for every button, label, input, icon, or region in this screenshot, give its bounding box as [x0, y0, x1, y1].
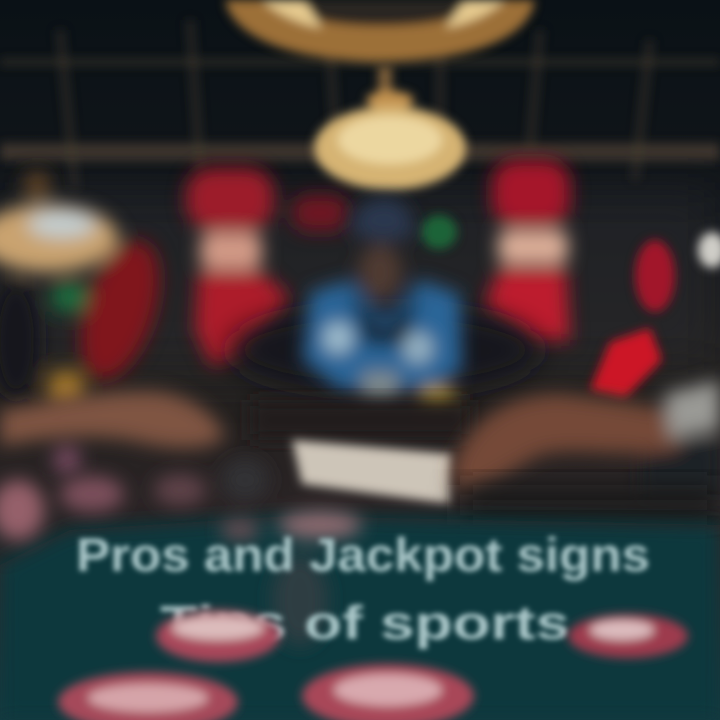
mid dark band — [0, 190, 720, 370]
chip: centre — [156, 610, 280, 662]
caption line 1: Pros and Jackpot signs — [76, 528, 650, 581]
lower dark band — [460, 485, 720, 525]
chip: bottom left — [58, 672, 238, 720]
right hand — [452, 380, 720, 500]
icon: lower chandelier — [314, 66, 466, 190]
right red figure — [484, 160, 570, 340]
white cards — [292, 440, 452, 504]
poker table felt — [0, 516, 720, 720]
caption line 2: Tips of sports — [160, 596, 570, 649]
ceiling lattice — [0, 20, 720, 190]
poker chips — [58, 610, 688, 720]
caption text — [76, 528, 650, 649]
centre dealer — [230, 198, 540, 412]
left hand — [0, 391, 224, 473]
far right red shapes — [590, 232, 720, 398]
icon: top chandelier — [225, 0, 535, 62]
left gold lamp and red figure — [0, 172, 175, 406]
table edge — [250, 400, 470, 440]
chip: bottom centre — [302, 664, 474, 720]
chip: right — [568, 614, 688, 658]
green accent — [421, 215, 457, 249]
left red figure — [186, 168, 348, 366]
left chip scatter — [0, 458, 362, 646]
